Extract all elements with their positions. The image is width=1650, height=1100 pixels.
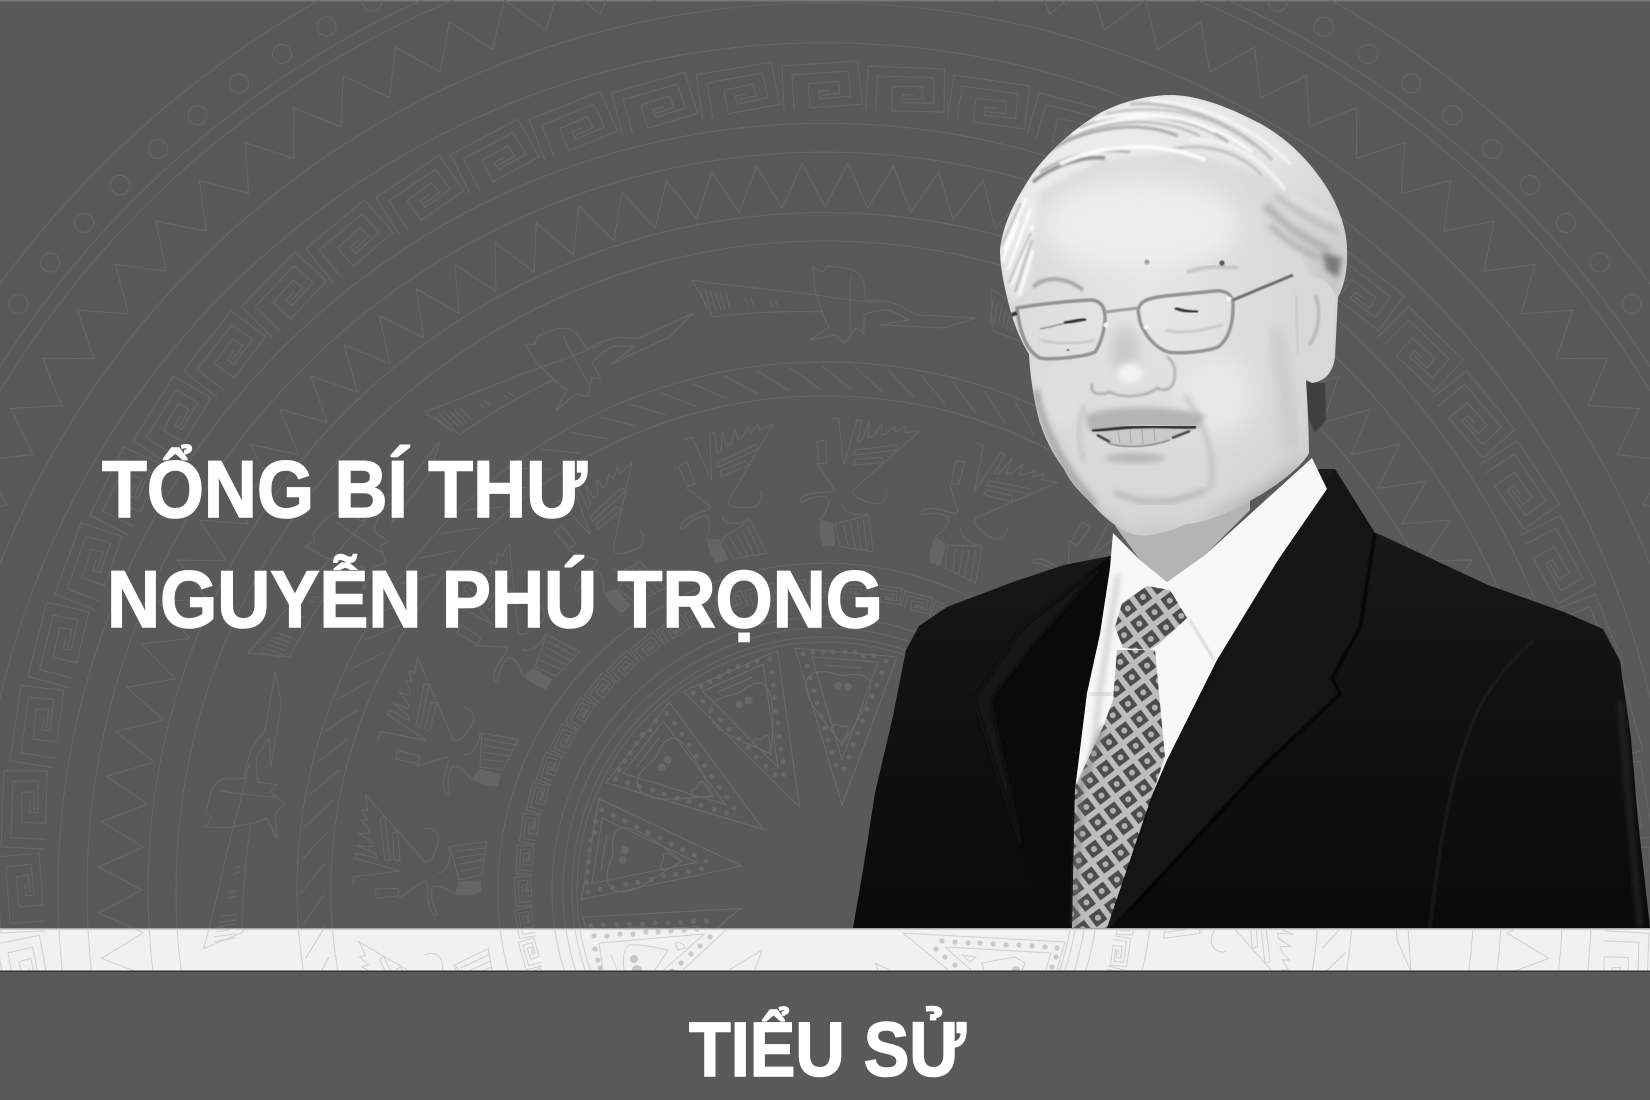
hair xyxy=(1000,95,1347,300)
face: eyebrows and moles xyxy=(1033,260,1238,290)
portrait: ear xyxy=(1295,277,1335,381)
portrait: face details xyxy=(1000,95,1347,545)
face: nose xyxy=(1092,326,1175,396)
face: eyes xyxy=(1040,308,1222,351)
bottom band xyxy=(0,972,1650,1100)
portrait: neck xyxy=(1105,495,1250,582)
portrait: hair behind ear xyxy=(1305,382,1326,433)
portrait photo of Nguyễn Phú Trọng xyxy=(840,95,1650,930)
title text: NGUYỄN PHÚ TRỌNG xyxy=(107,554,883,645)
light divider strip xyxy=(0,928,1650,972)
top edge line xyxy=(0,0,1650,2)
strip pattern: triangle motifs xyxy=(592,929,1066,970)
title text: TỔNG BÍ THƯ xyxy=(102,444,588,535)
face: mouth and teeth xyxy=(1085,408,1205,463)
section heading: TIỂU SỬ xyxy=(689,1006,966,1093)
portrait: patterned tie xyxy=(1072,586,1187,928)
title text xyxy=(102,444,883,645)
portrait: white shirt and collar xyxy=(1075,458,1327,800)
portrait: head base xyxy=(1000,95,1347,536)
face: shading xyxy=(1036,180,1309,545)
face: glasses xyxy=(1005,275,1293,359)
strip pattern: drum rings and motifs xyxy=(0,929,1650,970)
portrait: suit jacket xyxy=(840,460,1650,930)
